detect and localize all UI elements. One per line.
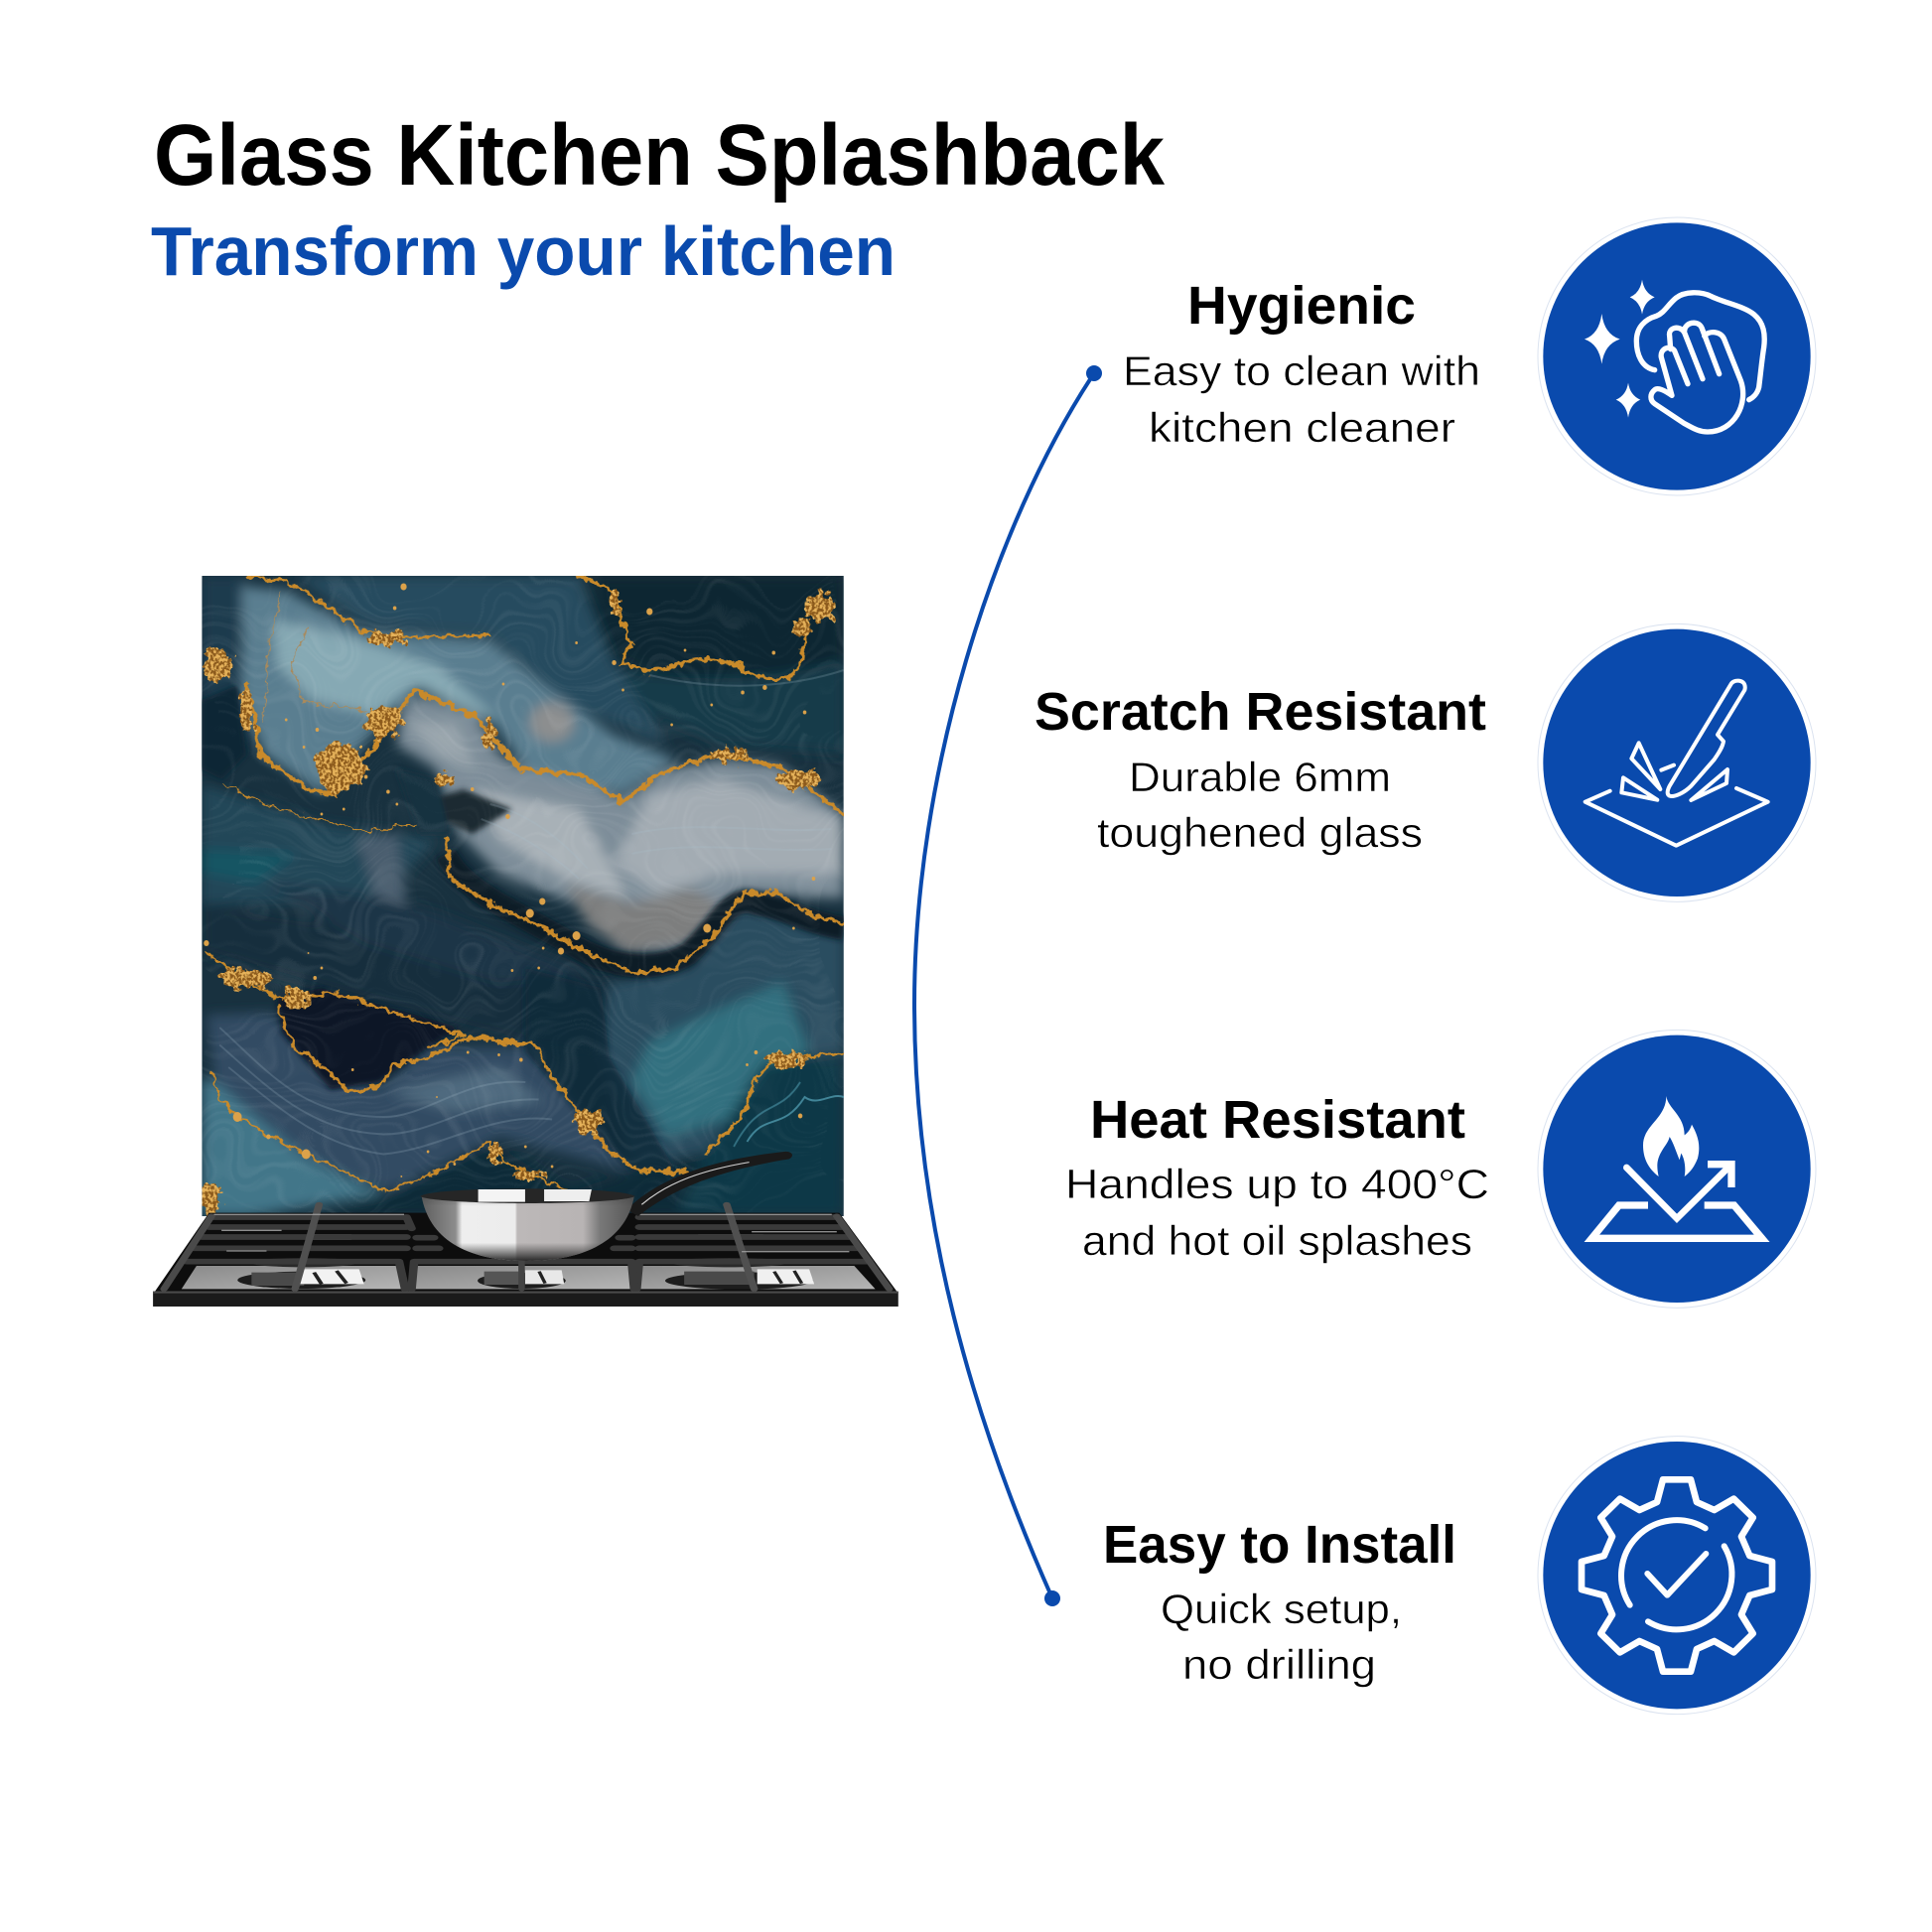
title: Glass Kitchen Splashback [154, 107, 1166, 204]
burners [237, 1234, 814, 1290]
cooktop grates [164, 1204, 890, 1289]
feature: Heat Resistant [1065, 1090, 1489, 1264]
description [1161, 1586, 1402, 1688]
marble panel [201, 576, 844, 1216]
frying pan [420, 1152, 792, 1261]
subtitle: Transform your kitchen [151, 212, 896, 290]
gas cooktop [153, 1204, 898, 1307]
description [1065, 1161, 1489, 1264]
description: and hot oil splashes [1082, 1217, 1472, 1264]
heading: Scratch Resistant [1035, 682, 1486, 742]
feature: Easy to Install [1103, 1515, 1456, 1688]
description: kitchen cleaner [1149, 404, 1455, 451]
gold speckles [204, 584, 815, 1177]
description: Easy to clean with [1123, 347, 1480, 394]
gold flakes [201, 588, 836, 1213]
icon: hand wiping cloth [1538, 217, 1816, 495]
steel burner trays [182, 1266, 876, 1289]
feature: Hygienic [1123, 276, 1480, 451]
heading: Easy to Install [1103, 1515, 1456, 1575]
heading: Heat Resistant [1090, 1090, 1465, 1150]
description [1123, 347, 1480, 451]
pan rim [420, 1188, 635, 1203]
icon: knife scratching glass [1538, 623, 1816, 901]
description: Handles up to 400°C [1065, 1161, 1489, 1207]
description: Quick setup, [1161, 1586, 1402, 1632]
gold veins [207, 576, 844, 1191]
icon: flame on heat-resistant surface [1538, 1030, 1816, 1308]
description: no drilling [1182, 1641, 1376, 1688]
description: toughened glass [1097, 809, 1423, 856]
description [1097, 754, 1423, 856]
pan body [422, 1196, 634, 1261]
front edge [153, 1292, 898, 1307]
connector curve with end dots [914, 365, 1102, 1606]
pan handle [626, 1152, 792, 1216]
infographic canvas [151, 121, 1817, 1716]
heading: Hygienic [1187, 276, 1416, 336]
feature: Scratch Resistant [1035, 682, 1486, 856]
icon: gear with check mark [1538, 1437, 1816, 1715]
product image: marble glass splashback with cooktop [153, 576, 898, 1307]
description: Durable 6mm [1129, 754, 1391, 800]
